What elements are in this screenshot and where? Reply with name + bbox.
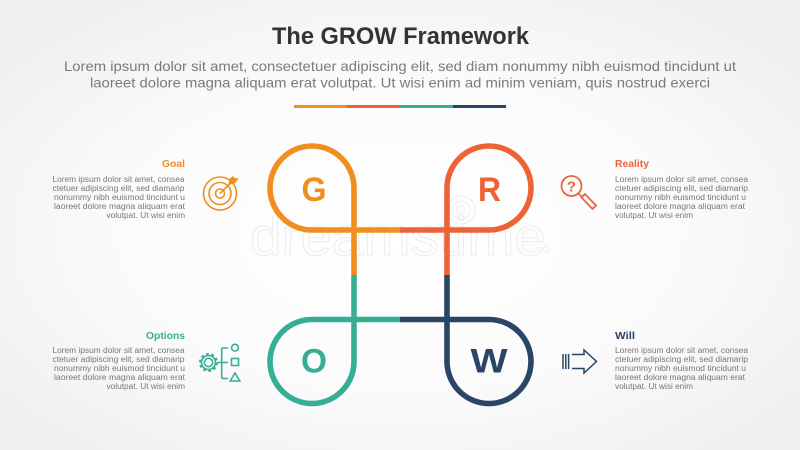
loop: O <box>270 275 400 404</box>
body: Will <box>615 346 749 391</box>
body: Will: laoreet dolore magna aliquam erat <box>615 373 746 382</box>
body: Goal: Lorem ipsum dolor sit amet, consea <box>52 175 185 184</box>
body: Goal: ctetuer adipiscing elit, sed diamarip <box>52 184 185 193</box>
body: Will: ctetuer adipiscing elit, sed diamarip <box>615 355 749 364</box>
icon: gear with options branches <box>200 344 240 381</box>
subtitle text <box>64 58 736 90</box>
body: Goal: nonummy nibh euismod tincidunt u <box>54 193 185 202</box>
panel: Options <box>52 331 186 391</box>
heading: Reality: Reality <box>615 159 649 170</box>
body: Options: volutpat. Ut wisi enim <box>106 382 185 391</box>
body: Goal: laoreet dolore magna aliquam erat <box>54 202 186 211</box>
panel: Will <box>615 331 749 391</box>
icon: arrow right <box>563 350 596 373</box>
body: Reality: volutpat. Ut wisi enim <box>615 211 693 220</box>
letter G: G <box>302 171 326 209</box>
title: The GROW Framework <box>272 23 530 50</box>
body: Will: nonummy nibh euismod tincidunt u <box>615 364 746 373</box>
icon: target <box>204 176 238 210</box>
body: Options: laoreet dolore magna aliquam erat <box>54 373 186 382</box>
body: Options <box>52 346 186 391</box>
body: Goal <box>52 175 186 220</box>
body: Reality: nonummy nibh euismod tincidunt u <box>615 193 746 202</box>
letter W: W <box>470 342 509 380</box>
body: Goal: volutpat. Ut wisi enim <box>106 211 185 220</box>
watermark: dreamstime <box>250 207 546 267</box>
panel: Reality <box>615 159 749 220</box>
icon: magnifier with question mark <box>562 176 596 209</box>
letter R: R <box>478 171 501 209</box>
body: Reality: ctetuer adipiscing elit, sed diamarip <box>615 184 749 193</box>
body: Options: nonummy nibh euismod tincidunt u <box>54 364 185 373</box>
body: Options: Lorem ipsum dolor sit amet, consea <box>52 346 185 355</box>
body: Will: volutpat. Ut wisi enim <box>615 382 693 391</box>
heading: Options: Options <box>146 331 185 342</box>
letter O: O <box>301 342 327 380</box>
body: Will: Lorem ipsum dolor sit amet, consea <box>615 346 749 355</box>
four-colour divider bar <box>294 105 506 108</box>
loop: W <box>400 275 531 404</box>
GROW quatrefoil diagram <box>270 146 531 404</box>
heading: Goal: Goal <box>162 159 185 170</box>
panel: Goal <box>52 159 186 220</box>
subtitle text: laoreet dolore magna aliquam erat volutpat. Ut wisi enim ad minim veniam, quis nostrud exerci <box>90 74 710 90</box>
subtitle text: Lorem ipsum dolor sit amet, consectetuer adipiscing elit, sed diam nonummy nibh euismod tincidunt ut <box>64 58 736 74</box>
body: Reality: Lorem ipsum dolor sit amet, consea <box>615 175 749 184</box>
body: Options: ctetuer adipiscing elit, sed diamarip <box>52 355 185 364</box>
heading: Will: Will <box>615 331 635 342</box>
body: Reality <box>615 175 749 220</box>
loop: R <box>400 146 531 275</box>
body: Reality: laoreet dolore magna aliquam erat <box>615 202 746 211</box>
icon: magnifier with question mark: ? <box>567 178 576 196</box>
loop: G <box>270 146 400 275</box>
